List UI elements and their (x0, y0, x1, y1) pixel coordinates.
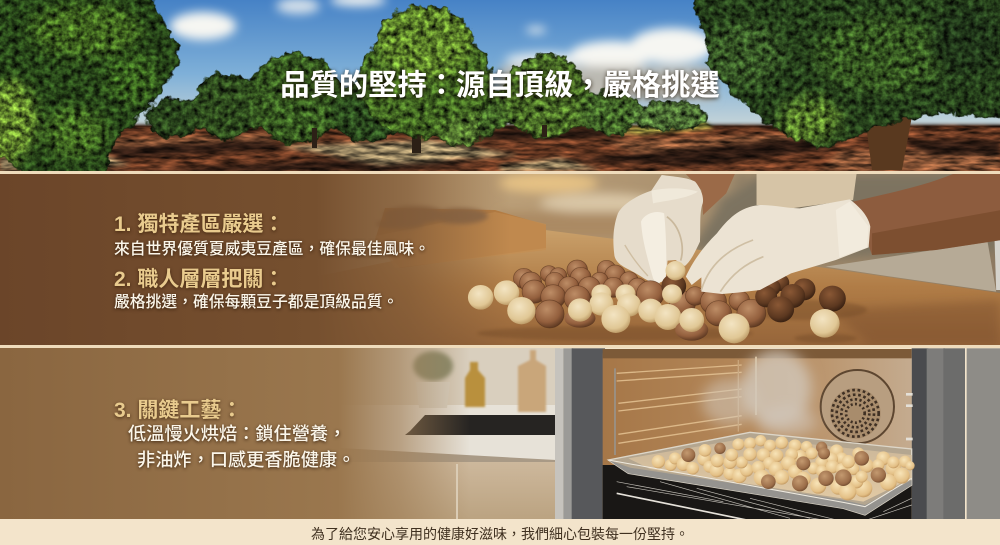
text: craft description line two: 非油炸，口感更香脆健康。 (137, 450, 355, 470)
bottle (465, 362, 485, 407)
footer text: 為了給您安心享用的健康好滋味，我們細心包裝每一份堅持。 (311, 526, 689, 542)
arms and apron (686, 174, 1000, 292)
soil ground (0, 120, 1000, 171)
panel: oven roasting photo (0, 348, 1000, 523)
bottom oven rack (617, 482, 912, 520)
cutting board (518, 350, 546, 412)
baking tray with nuts (608, 432, 915, 515)
oven racks (615, 357, 756, 455)
footer band (0, 519, 1000, 545)
convection fan (821, 370, 913, 443)
left brown fade (0, 174, 510, 345)
divider band (0, 345, 1000, 348)
left foreground tree (0, 0, 182, 180)
text: inspection description: 嚴格挑選，確保每顆豆子都是頂級品質。 (114, 294, 398, 311)
wooden table (355, 230, 1000, 345)
oven cavity (603, 349, 912, 520)
text: origin description: 來自世界優質夏威夷豆產區，確保最佳風味。 (114, 241, 430, 258)
right foreground tree (690, 0, 1000, 170)
distant tree row (146, 52, 708, 144)
kitchen background (340, 348, 560, 519)
plant in pot (413, 351, 453, 408)
wooden tray with nuts (375, 206, 546, 260)
left brown fade (0, 348, 470, 519)
heading: 2 artisan inspection: 2. 職人層層把關： (114, 268, 284, 291)
heading: 3 key craft: 3. 關鍵工藝： (114, 399, 242, 422)
macadamia nuts on table (468, 260, 867, 343)
panel: macadamia orchard photo (0, 0, 1000, 181)
panel: hands sorting macadamia nuts photo (0, 173, 1000, 345)
text: craft description: 低溫慢火烘焙：鎖住營養， (128, 424, 346, 444)
heading: 1 unique origin selection: 1. 獨特產區嚴選： (114, 213, 284, 236)
divider band (0, 171, 1000, 174)
title: 品質的堅持：源自頂級，嚴格挑選 (280, 69, 720, 102)
gloved left hand (613, 175, 703, 284)
blurred kitchen background (498, 173, 1000, 260)
gloved right hand (686, 199, 870, 294)
oven frame (555, 348, 1000, 523)
steam (702, 350, 817, 437)
clouds (170, 0, 715, 100)
centre tree (312, 6, 547, 153)
